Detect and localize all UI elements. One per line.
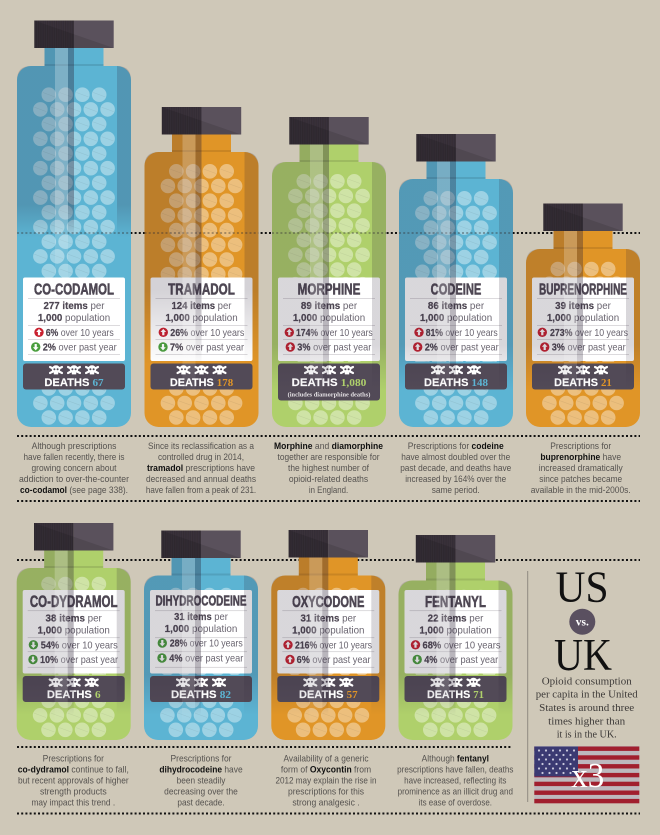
bottle: co-dydramol (16, 523, 131, 740)
label: dihydrocodeine: 28% over 10 years (170, 638, 243, 650)
label: tramadol: TRAMADOL (168, 281, 235, 298)
label: dihydrocodeine: 4% over past year (169, 654, 244, 664)
label: codeine (405, 278, 507, 390)
note: buprenorphine (531, 441, 631, 496)
text block: consumption comparison (536, 675, 638, 741)
label: morphine: 89 items per (301, 301, 358, 312)
cap: dihydrocodeine (161, 530, 241, 558)
label: morphine: 3% over past year (297, 342, 372, 354)
label: oxycodone: 31 items per (300, 614, 357, 625)
note: buprenorphine: increased dramatically (539, 463, 623, 474)
label: tramadol: DEATHS 178 (170, 377, 234, 389)
note: dihydrocodeine (159, 754, 243, 808)
note: fentanyl: prescriptions have fallen, deaths (397, 765, 514, 776)
heading: US: US (556, 563, 608, 612)
note: morphine: Morphine and diamorphine (274, 441, 383, 452)
note: fentanyl: its ease of overdose. (419, 798, 492, 808)
note: co-dydramol: may impact this trend . (31, 798, 115, 808)
label: morphine: MORPHINE (298, 281, 360, 298)
label: codeine: DEATHS 148 (424, 377, 489, 389)
note: tramadol: controlled drug in 2014, (158, 452, 244, 463)
note: fentanyl: prominence as an illicit drug and (398, 786, 513, 798)
note: morphine: the highest number of (288, 463, 369, 474)
dotted rule: above row two notes (17, 746, 512, 748)
bottle: oxycodone (271, 530, 386, 740)
text block: consumption comparison: times higher than (548, 715, 626, 727)
note: dihydrocodeine: past decade. (177, 798, 225, 808)
note: co-codamol: growing concern about (32, 463, 117, 474)
bottle: tramadol (144, 107, 258, 427)
note: tramadol: decreased and annual deaths (146, 474, 256, 485)
label: co-dydramol: 1,000 population (38, 626, 110, 637)
cap: fentanyl (416, 535, 495, 562)
label: buprenorphine: 3% over past year (552, 342, 626, 354)
label: buprenorphine (532, 278, 634, 390)
label: morphine: 1,000 population (293, 313, 365, 324)
label: oxycodone (277, 590, 379, 702)
label: buprenorphine: DEATHS 21 (554, 377, 612, 389)
cap: co-codamol (34, 20, 114, 48)
divider: US vs UK column (527, 571, 529, 802)
label: buprenorphine: 1,000 population (547, 313, 619, 324)
label: co-codamol: 6% over 10 years (46, 328, 114, 339)
note: oxycodone: form of Oxycontin from (281, 765, 371, 776)
label: oxycodone: DEATHS 57 (299, 689, 358, 701)
note: co-codamol: Although prescriptions (32, 441, 117, 452)
note: codeine: same period. (432, 485, 480, 496)
note: co-dydramol: co-dydramol continue to fall, (18, 765, 129, 776)
note: fentanyl: Although fentanyl (422, 754, 489, 765)
icon: US flag x3 (534, 746, 639, 803)
note: tramadol: Since its reclassification as a (148, 441, 255, 452)
label: oxycodone: 6% over past year (297, 655, 371, 666)
note: dihydrocodeine: decreasing over the (164, 786, 238, 798)
label: co-codamol: CO-CODAMOL (34, 281, 114, 298)
label: morphine: (includes diamorphine deaths) (288, 391, 370, 398)
cap: buprenorphine (543, 204, 623, 231)
label: co-codamol: 277 items per (44, 301, 105, 312)
note: morphine (274, 441, 383, 496)
label: morphine (278, 278, 380, 400)
note: oxycodone: prescriptions for this (288, 786, 364, 798)
note: buprenorphine: available in the mid-2000s. (531, 485, 631, 496)
note: co-dydramol: strength products (40, 786, 107, 798)
note: co-codamol (19, 441, 129, 496)
bottle: morphine (272, 117, 386, 427)
note: morphine: together are responsible for (278, 452, 380, 463)
text block: consumption comparison: it is in the UK. (557, 729, 617, 741)
bottle: dihydrocodeine (144, 530, 258, 740)
note: codeine: Prescriptions for codeine (408, 441, 504, 452)
label: codeine: 1,000 population (420, 313, 492, 324)
note: buprenorphine: since patches became (539, 474, 622, 485)
text block: consumption comparison: States is around three (539, 702, 634, 714)
label: co-codamol: 2% over past year (43, 342, 117, 354)
label: co-dydramol: CO-DYDRAMOL (30, 593, 118, 611)
note: tramadol: tramadol prescriptions have (147, 463, 255, 474)
note: codeine: increased by 164% over the (405, 474, 506, 485)
label: fentanyl: 4% over past year (424, 655, 499, 666)
label: co-dydramol: DEATHS 6 (47, 689, 101, 701)
note: morphine: opioid-related deaths (289, 474, 368, 485)
dotted rule: row one mid line (17, 232, 640, 234)
label: fentanyl: FENTANYL (425, 594, 486, 611)
label: fentanyl: 1,000 population (419, 626, 492, 637)
cap: tramadol (162, 107, 241, 134)
label: co-dydramol (23, 590, 125, 702)
label: co-dydramol: 38 items per (46, 614, 102, 625)
note: co-dydramol: Prescriptions for (43, 754, 104, 765)
note: tramadol (146, 441, 256, 496)
label: codeine: 2% over past year (425, 342, 499, 354)
note: buprenorphine: Prescriptions for (550, 441, 611, 452)
panel: US vs UK (534, 563, 639, 803)
label: co-dydramol: 54% over 10 years (41, 640, 118, 651)
dotted rule: row two mid line (17, 559, 640, 561)
note: dihydrocodeine: been steadily (177, 776, 226, 786)
label: dihydrocodeine: 1,000 population (165, 624, 237, 635)
cap: codeine (416, 134, 496, 162)
label: morphine: 174% over 10 years (296, 328, 373, 339)
bottle: fentanyl (398, 535, 512, 740)
dotted rule: below row one notes (17, 500, 640, 502)
badge: vs: vs. (576, 616, 589, 628)
label: oxycodone: OXYCODONE (292, 594, 364, 611)
text block: consumption comparison: per capita in the United (536, 689, 638, 701)
label: co-codamol: 1,000 population (38, 313, 110, 324)
icon: US flag x3: x3 (571, 756, 604, 795)
note: morphine: in England. (309, 485, 348, 496)
note: fentanyl (397, 754, 514, 808)
note: co-dydramol: but recent approvals of higher (18, 776, 129, 786)
label: dihydrocodeine: DEATHS 82 (171, 689, 231, 701)
bottle: co-codamol (17, 20, 131, 427)
heading: UK: UK (554, 630, 612, 680)
label: dihydrocodeine: 31 items per (174, 612, 228, 623)
label: tramadol (150, 278, 252, 390)
label: buprenorphine: 39 items per (555, 301, 611, 312)
note: oxycodone: Availability of a generic (284, 754, 369, 765)
label: dihydrocodeine (150, 590, 252, 702)
note: co-dydramol (18, 754, 129, 808)
note: tramadol: have fallen from a peak of 231. (146, 485, 256, 496)
label: codeine: CODEINE (431, 281, 481, 298)
note: codeine: past decade, and deaths have (400, 463, 511, 474)
label: tramadol: 26% over 10 years (170, 328, 244, 339)
note: co-codamol: addiction to over-the-counter (19, 474, 129, 485)
label: oxycodone: 216% over 10 years (295, 640, 372, 651)
label: tramadol: 124 items per (172, 301, 232, 312)
label: fentanyl: 68% over 10 years (422, 640, 500, 651)
note: oxycodone: 2012 may explain the rise in (276, 776, 376, 786)
label: co-dydramol: 10% over past year (40, 655, 119, 666)
label: morphine: DEATHS 1,080 (292, 377, 366, 389)
label: fentanyl: DEATHS 71 (427, 689, 484, 701)
label: co-codamol (23, 278, 125, 390)
text block: consumption comparison: Opioid consumption (542, 675, 632, 687)
label: fentanyl (404, 590, 506, 702)
label: dihydrocodeine: DIHYDROCODEINE (156, 594, 247, 610)
dotted rule: below row two notes (17, 812, 640, 814)
label: oxycodone: 1,000 population (292, 626, 364, 637)
note: co-codamol: have fallen recently, there is (24, 452, 125, 463)
note: co-codamol: co-codamol (see page 338). (20, 485, 128, 496)
note: codeine: have almost doubled over the (401, 452, 510, 463)
label: buprenorphine: 273% over 10 years (550, 328, 628, 339)
note: fentanyl: have increased, reflecting its (404, 776, 507, 786)
cap: oxycodone (289, 530, 368, 558)
label: codeine: 86 items per (428, 301, 485, 312)
label: co-codamol: DEATHS 67 (44, 377, 104, 389)
note: dihydrocodeine: dihydrocodeine have (159, 765, 243, 776)
note: buprenorphine: buprenorphine have (540, 452, 621, 463)
note: oxycodone: strong analgesic . (292, 798, 360, 808)
note: dihydrocodeine: Prescriptions for (170, 754, 232, 765)
note: codeine (400, 441, 511, 496)
bottle: codeine (399, 134, 513, 427)
label: fentanyl: 22 items per (428, 614, 484, 625)
cap: co-dydramol (34, 523, 113, 550)
note: oxycodone (276, 754, 376, 808)
cap: morphine (289, 117, 369, 144)
bottle: buprenorphine (526, 204, 640, 427)
label: codeine: 81% over 10 years (426, 328, 498, 339)
label: tramadol: 7% over past year (170, 342, 245, 354)
badge: vs (569, 609, 595, 635)
dotted rule: above row one notes (17, 435, 640, 437)
label: tramadol: 1,000 population (165, 313, 238, 324)
